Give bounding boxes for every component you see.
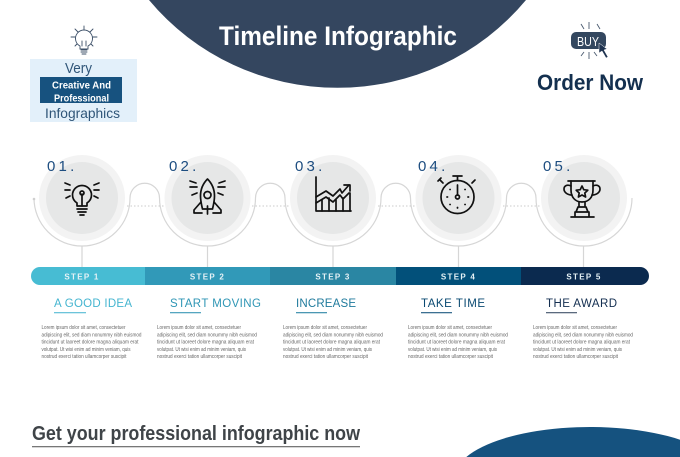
body text: tincidunt ut laoreet dolore magna aliquam erat: [283, 340, 381, 346]
logo band text: [52, 80, 111, 104]
body text: Lorem ipsum dolor sit amet, consectetuer: [533, 325, 617, 331]
body text: tincidunt ut laoreet dolore magna aliquam erat: [408, 340, 506, 346]
body text: Lorem ipsum dolor sit amet, consectetuer: [42, 325, 126, 331]
body text: [533, 325, 633, 360]
logo word: Infographics: Infographics: [45, 105, 120, 121]
icon: rocket: [190, 179, 225, 214]
panel: step 4: [408, 155, 508, 360]
number 02: 02.: [169, 158, 199, 175]
body text: adipiscing elit, sed diam nonummy nibh euismod: [157, 332, 257, 338]
order now block: [537, 22, 644, 95]
body text: tincidunt ut laoreet dolore magna aliquam erat: [533, 340, 631, 346]
step bar: STEP 3: [315, 272, 351, 282]
top banner with title: [149, 0, 526, 88]
logo band: [40, 77, 122, 103]
body text: [157, 325, 257, 360]
heading: A GOOD IDEA: [54, 298, 132, 310]
heading: TAKE TIME: [421, 298, 485, 310]
body text: adipiscing elit, sed diam nonummy nibh euismod: [42, 332, 142, 338]
body text: adipiscing elit, sed diam nonummy nibh euismod: [533, 332, 633, 338]
body text: Lorem ipsum dolor sit amet, consectetuer: [283, 325, 367, 331]
icon: stopwatch: [438, 176, 475, 214]
icon: trophy: [564, 181, 600, 217]
heading: START MOVING: [170, 298, 261, 310]
body text: volutpat. Ut wisi enim ad minim veniam, quis: [408, 347, 497, 353]
body text: [42, 325, 142, 360]
step bar: STEP 4: [441, 272, 476, 282]
icon: light bulb: [65, 183, 99, 215]
body text: [408, 325, 508, 360]
body text: nostrud exerci tation ullamcorper suscipit: [157, 354, 243, 360]
step bar: STEP 1: [64, 272, 100, 282]
body text: tincidunt ut laoreet dolore magna aliquam erat: [157, 340, 255, 346]
body text: nostrud exerci tation ullamcorper suscipit: [408, 354, 494, 360]
icon: growth chart: [316, 177, 351, 211]
body text: tincidunt ut laoreet dolore magna aliquam erat: [42, 340, 139, 346]
panel: step 2: [157, 155, 261, 360]
title: Timeline Infographic: [219, 21, 457, 51]
bottom corner shape: [466, 427, 680, 457]
body text: volutpat. Ut wisi enim ad minim veniam, quis: [157, 347, 246, 353]
number 05: 05.: [543, 158, 573, 175]
step bar: [31, 267, 649, 285]
logo background: [30, 59, 137, 122]
body text: nostrud exerci tation ullamcorper suscipit: [533, 354, 619, 360]
icon: light bulb: [71, 26, 97, 54]
logo band text: Creative And: [52, 80, 111, 92]
body text: volutpat. Ut wisi enim ad minim veniam, quis: [42, 347, 131, 353]
logo band text: Professional: [54, 92, 109, 104]
panel: step 3: [283, 155, 383, 360]
body text: Lorem ipsum dolor sit amet, consectetuer: [157, 325, 241, 331]
step bar: STEP 2: [190, 272, 225, 282]
heading: THE AWARD: [546, 298, 617, 310]
logo block: [30, 26, 137, 122]
body text: [283, 325, 383, 360]
icon: buy button: BUY: [577, 34, 599, 49]
heading: INCREASE: [296, 298, 356, 310]
body text: nostrud exerci tation ullamcorper suscipit: [42, 354, 127, 360]
order now text: Order Now: [537, 70, 644, 95]
number 03: 03.: [295, 158, 325, 175]
number 04: 04.: [418, 158, 448, 175]
body text: adipiscing elit, sed diam nonummy nibh euismod: [408, 332, 508, 338]
panel: step 5: [533, 155, 633, 360]
connector line: [33, 183, 632, 267]
logo word: Very: Very: [65, 61, 93, 77]
body text: volutpat. Ut wisi enim ad minim veniam, quis: [283, 347, 372, 353]
body text: nostrud exerci tation ullamcorper suscipit: [283, 354, 369, 360]
body text: Lorem ipsum dolor sit amet, consectetuer: [408, 325, 492, 331]
footer call to action: Get your professional infographic now: [32, 423, 360, 445]
step bar: STEP 5: [566, 272, 602, 282]
panel: step 1: [39, 155, 142, 360]
body text: volutpat. Ut wisi enim ad minim veniam, quis: [533, 347, 622, 353]
number 01: 01.: [47, 158, 77, 175]
body text: adipiscing elit, sed diam nonummy nibh euismod: [283, 332, 383, 338]
